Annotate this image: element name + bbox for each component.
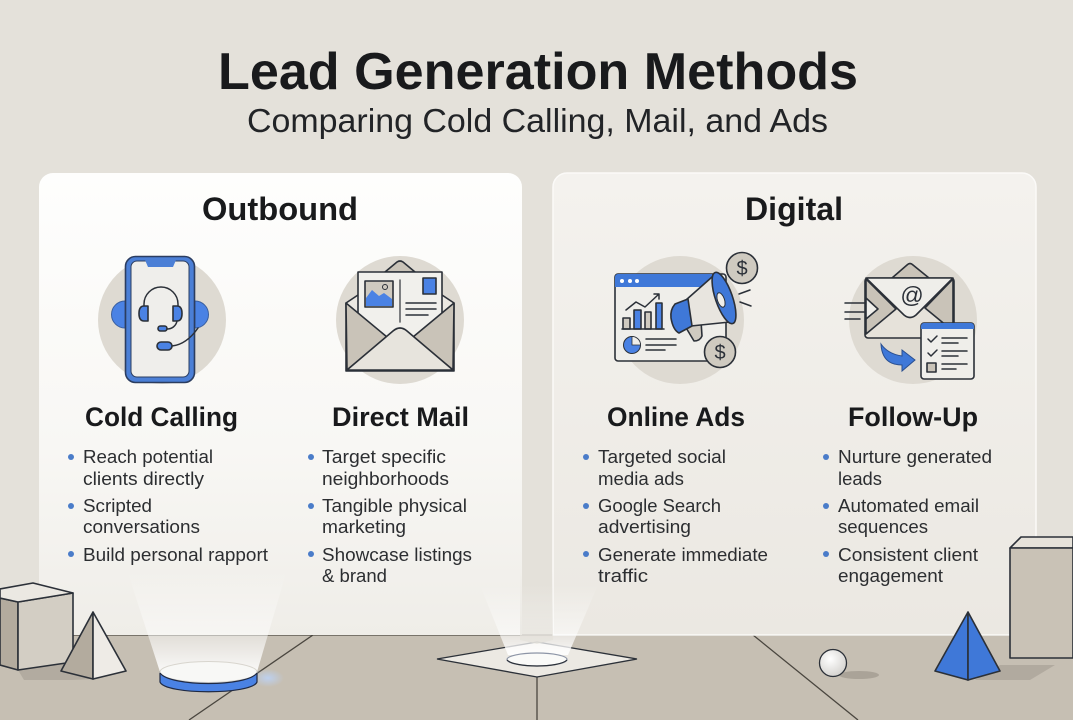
- bullet list: direct mail: marketing: [322, 516, 406, 537]
- cube: right: [1010, 537, 1073, 658]
- bullet list: online ads: traffic: [598, 565, 648, 586]
- icon: direct mail: [336, 256, 464, 384]
- bullet list: cold calling: clients directly: [83, 468, 205, 489]
- floor: [0, 635, 1073, 720]
- sphere: [820, 650, 879, 679]
- beam platform: left: [127, 570, 287, 692]
- bullet list: online ads: Google Search: [598, 495, 721, 516]
- beam platform: center: [437, 570, 637, 677]
- heading: direct mail: Direct Mail: [332, 402, 469, 432]
- bullet list: online ads: [583, 446, 768, 586]
- heading: online ads: Online Ads: [607, 402, 745, 432]
- subtitle: Comparing Cold Calling, Mail, and Ads: [247, 102, 828, 139]
- bullet list: cold calling: Build personal rapport: [83, 544, 268, 565]
- heading: outbound: Outbound: [202, 191, 358, 227]
- bullet list: follow-up: [823, 446, 992, 586]
- bullet list: follow-up: engagement: [838, 565, 943, 586]
- bullet list: follow-up: Consistent client: [838, 544, 978, 565]
- column: cold calling: [68, 402, 268, 565]
- column: follow-up: [823, 402, 992, 586]
- column: direct mail: [308, 402, 472, 586]
- panel: outbound: [39, 173, 522, 635]
- bullet list: direct mail: Showcase listings: [322, 544, 472, 565]
- bullet list: cold calling: Scripted: [83, 495, 152, 516]
- bullet list: direct mail: & brand: [322, 565, 387, 586]
- bullet list: online ads: Generate immediate: [598, 544, 768, 565]
- heading: digital: Digital: [745, 191, 843, 227]
- bullet list: cold calling: conversations: [83, 516, 200, 537]
- heading: cold calling: Cold Calling: [85, 402, 238, 432]
- icon: follow-up: [845, 256, 977, 384]
- bullet list: follow-up: leads: [838, 468, 882, 489]
- bullet list: cold calling: Reach potential: [83, 446, 213, 467]
- pyramid: blue: [935, 612, 1055, 680]
- bullet list: cold calling: [68, 446, 268, 565]
- bullet list: direct mail: [308, 446, 472, 586]
- heading: follow-up: Follow-Up: [848, 402, 978, 432]
- bullet list: direct mail: Tangible physical: [322, 495, 467, 516]
- icon: phone with headset: [98, 256, 226, 384]
- bullet list: direct mail: Target specific: [322, 446, 446, 467]
- cube: left: [0, 583, 95, 680]
- bullet list: online ads: media ads: [598, 468, 684, 489]
- title: Lead Generation Methods: [218, 43, 858, 101]
- bullet list: direct mail: neighborhoods: [322, 468, 449, 489]
- bullet list: follow-up: sequences: [838, 516, 928, 537]
- bullet list: online ads: Targeted social: [598, 446, 726, 467]
- icon: follow-up: @: [900, 282, 924, 308]
- icon: online ads: $: [736, 258, 748, 280]
- bullet list: follow-up: Nurture generated: [838, 446, 992, 467]
- panel: digital: [553, 173, 1036, 635]
- bullet list: follow-up: Automated email: [838, 495, 979, 516]
- column: online ads: [583, 402, 768, 586]
- bullet list: online ads: advertising: [598, 516, 691, 537]
- icon: online ads: $: [714, 342, 726, 364]
- icon: online ads: [615, 252, 758, 384]
- pyramid: left: [61, 612, 126, 679]
